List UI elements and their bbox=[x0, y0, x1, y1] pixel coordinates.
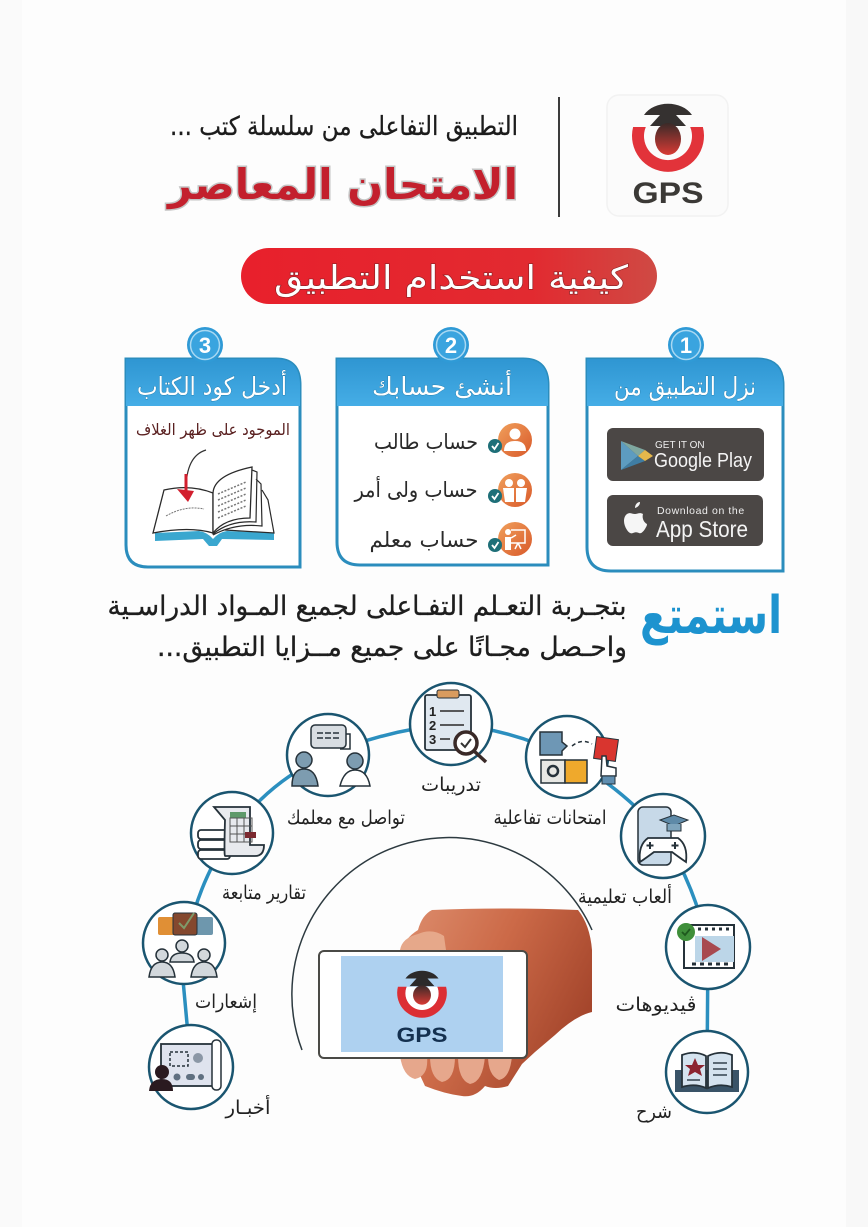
feature: videos: ڤيديوهات bbox=[616, 994, 696, 1016]
intro text bbox=[108, 591, 627, 663]
feature: explanation: شرح bbox=[636, 1101, 672, 1123]
hand bbox=[400, 908, 592, 1096]
step number 1 bbox=[668, 327, 704, 363]
feature: explanation bbox=[636, 1031, 748, 1123]
feature: exercises bbox=[410, 683, 492, 796]
feature: progress reports bbox=[191, 792, 306, 904]
feature: notifications bbox=[143, 902, 257, 1014]
button: Google Play: GET IT ON bbox=[655, 440, 705, 451]
phone logo: GPS bbox=[396, 1024, 448, 1047]
hand holding phone bbox=[319, 908, 592, 1096]
GPS logo card: GPS bbox=[632, 177, 704, 210]
feature: exercises: 2 bbox=[429, 718, 436, 733]
feature: notifications: إشعارات bbox=[195, 991, 257, 1014]
icon: open book with arrow bbox=[153, 450, 274, 546]
button: Google Play: Google Play bbox=[654, 450, 752, 472]
heading pill: how to use the app bbox=[241, 248, 657, 304]
button: Google Play bbox=[607, 428, 764, 481]
phone bbox=[319, 951, 527, 1058]
feature: progress reports: تقارير متابعة bbox=[222, 882, 306, 904]
feature: teacher communication bbox=[287, 714, 405, 829]
teacher account row: حساب معلم bbox=[370, 528, 478, 553]
panel: step 1 download bbox=[587, 327, 783, 571]
enjoy word: استمتع bbox=[640, 586, 782, 646]
button: App Store: Download on the bbox=[657, 505, 745, 517]
phone logo bbox=[396, 971, 448, 1047]
feature: videos bbox=[616, 905, 750, 1016]
step number 2: 2 bbox=[445, 333, 457, 358]
GPS logo card bbox=[607, 95, 728, 216]
large circle around hand bbox=[292, 838, 592, 1050]
main title: الامتحان المعاصر bbox=[166, 160, 518, 210]
teacher account row bbox=[370, 522, 532, 556]
feature: interactive exams bbox=[494, 716, 618, 829]
button: App Store bbox=[607, 495, 763, 546]
feature: teacher communication: تواصل مع معلمك bbox=[287, 807, 405, 829]
parent account row: حساب ولى أمر bbox=[354, 476, 478, 502]
subtitle: التطبيق التفاعلى من سلسلة كتب ... bbox=[170, 112, 518, 142]
intro text: واحـصل مجـانًا على جميع مــزايا التطبيق... bbox=[157, 632, 627, 663]
feature: exercises: 3 bbox=[429, 732, 436, 747]
feature: exercises: 1 bbox=[429, 704, 436, 719]
feature: educational games bbox=[578, 794, 705, 908]
feature arc connectors bbox=[183, 724, 708, 1072]
heading pill: how to use the app: كيفية استخدام التطبيق bbox=[274, 258, 628, 298]
intro text: بتجـربة التعـلم التفـاعلى لجميع المـواد الدراسـية bbox=[108, 591, 626, 622]
header divider bbox=[558, 97, 560, 217]
button: App Store: App Store bbox=[656, 516, 748, 542]
step number 3 bbox=[187, 327, 223, 363]
feature: exercises: تدريبات bbox=[421, 774, 481, 796]
feature: interactive exams: امتحانات تفاعلية bbox=[494, 807, 606, 829]
parent account row bbox=[354, 473, 532, 507]
panel heading: نزل التطبيق من bbox=[614, 372, 756, 401]
feature: educational games: ألعاب تعليمية bbox=[578, 884, 672, 908]
panel: step 2 create account bbox=[337, 327, 548, 565]
panel heading: أنشئ حسابك bbox=[372, 369, 512, 401]
step number 3: 3 bbox=[199, 333, 211, 358]
phone screen bbox=[341, 956, 503, 1052]
feature: news: أخبـار bbox=[224, 1095, 270, 1119]
feature: news bbox=[149, 1025, 270, 1119]
student account row bbox=[374, 423, 532, 457]
cover note: الموجود على ظهر الغلاف bbox=[136, 420, 290, 440]
panel heading: أدخل كود الكتاب bbox=[137, 369, 287, 401]
student account row: حساب طالب bbox=[374, 430, 478, 454]
step number 2 bbox=[433, 327, 469, 363]
step number 1: 1 bbox=[680, 333, 692, 358]
panel: step 3 enter book code bbox=[126, 327, 300, 567]
